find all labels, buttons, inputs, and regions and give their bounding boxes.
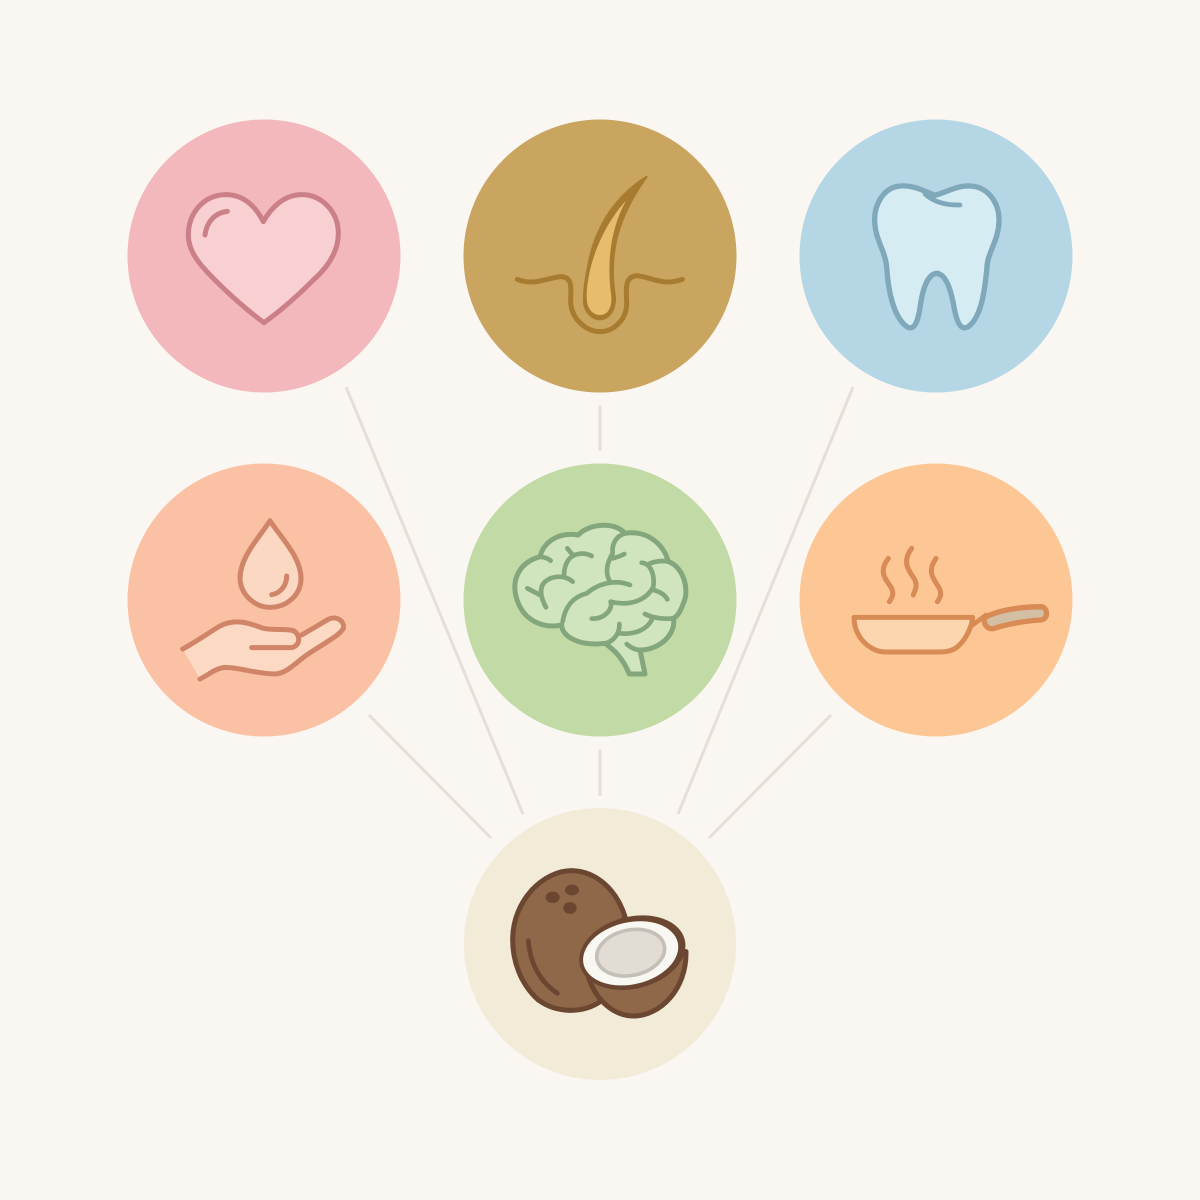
- icon: brain: [515, 525, 686, 674]
- panel: coconut circle: [464, 808, 736, 1080]
- icon: hair follicle: [517, 177, 682, 332]
- panel: frying pan circle: [800, 464, 1072, 736]
- icon: tooth: [875, 186, 999, 328]
- panel: hair circle: [464, 120, 736, 392]
- icon: coconut: [513, 871, 693, 1016]
- icon: heart: [188, 195, 338, 323]
- panel: hand and drop circle: [128, 464, 400, 736]
- icon: hand with oil drop: [183, 521, 344, 679]
- panel: heart circle: [128, 120, 400, 392]
- connector lines: [346, 387, 853, 838]
- panel: brain circle: [464, 464, 736, 736]
- panel: tooth circle: [800, 120, 1072, 392]
- icon: frying pan with steam: [854, 548, 1047, 652]
